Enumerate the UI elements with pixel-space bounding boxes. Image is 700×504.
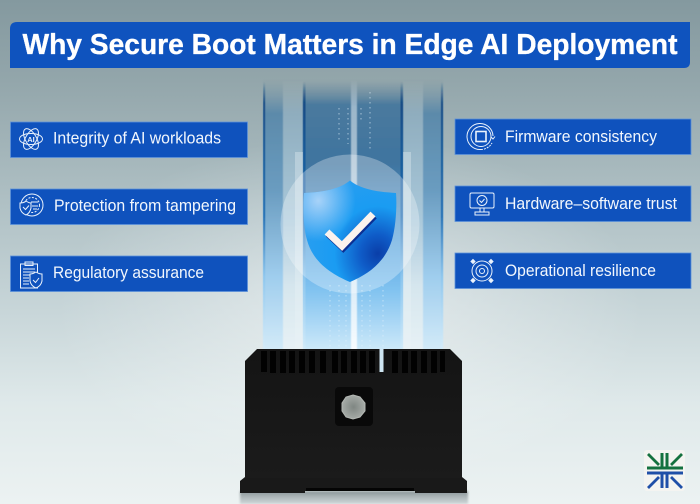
icon: AI atom [20,126,42,152]
label: Integrity of AI workloads [53,130,221,148]
label: Protection from tampering [54,197,236,215]
panel: regulatory assurance [10,256,248,292]
device: edge AI box [240,349,467,493]
panel: hardware-software trust [455,186,691,222]
light beams [263,80,443,355]
bolt recess [335,387,373,426]
logo [644,450,685,491]
label: Operational resilience [505,262,656,280]
panel: integrity of AI workloads [10,122,248,158]
panel: firmware consistency [455,119,691,154]
icon: monitor with check [470,193,494,215]
heat sink fins [261,351,445,373]
title text: Why Secure Boot Matters in Edge AI Deployment [22,29,678,61]
icon: shield with checkmark [303,180,396,282]
label: Firmware consistency [505,128,658,146]
glow circle [280,154,420,294]
icon: shield on globe [20,194,43,216]
icon: target with diamonds [471,260,493,282]
device body [245,349,462,478]
icon: chip in cycle [467,124,495,150]
title banner [10,22,690,68]
label: Regulatory assurance [53,264,204,282]
panel: protection from tampering [10,189,248,224]
device feet [240,477,467,493]
icon: AI atom: AI [27,135,35,144]
bolt [342,395,365,419]
label: Hardware–software trust [505,195,677,213]
panel: operational resilience [455,253,691,288]
icon: clipboard with shield [20,262,42,288]
